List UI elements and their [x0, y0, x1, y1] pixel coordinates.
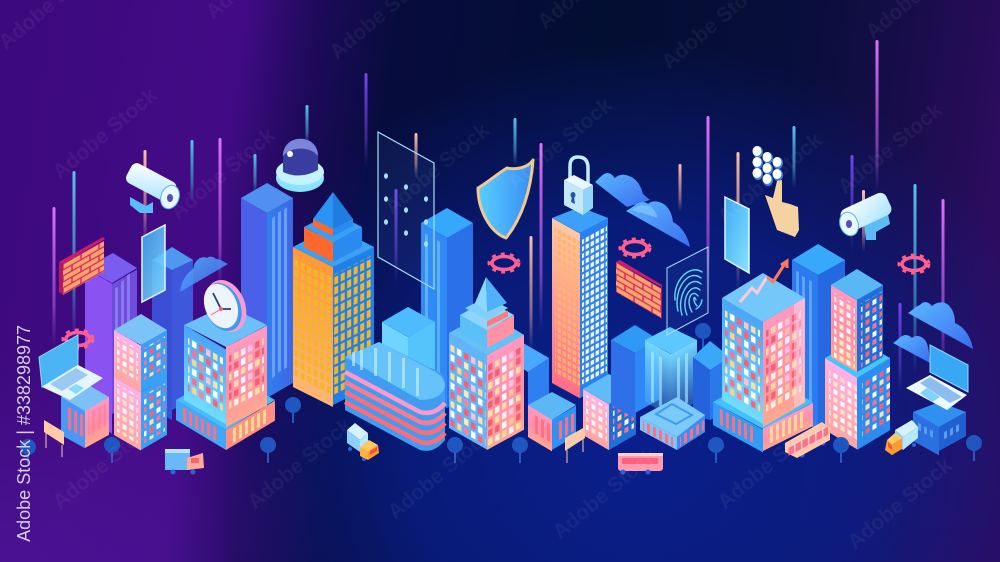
watermarks: Adobe Stock: [503, 94, 617, 194]
watermarks: Adobe Stock: [383, 424, 497, 524]
icon: center truck: [347, 423, 379, 461]
icon: right clouds: [893, 302, 973, 363]
building: pale cyan block: [382, 307, 435, 417]
icon: right truck: [885, 420, 918, 455]
building: rear block right of glass: [693, 341, 730, 420]
building: tall salmon tower: [552, 207, 608, 398]
icon: right bus: [785, 422, 830, 458]
icon: center brick wall: [616, 260, 662, 319]
watermarks: Adobe Stock: [548, 444, 662, 544]
building: purple tower: [85, 253, 137, 434]
icon: left security camera: [124, 161, 183, 213]
building: chip rooftop block: [640, 397, 705, 450]
icon: pointing hand: [765, 180, 799, 237]
icon: fingerprint panel: [667, 247, 708, 335]
icon: left cloud: [180, 257, 228, 292]
icon: right laptop: [906, 345, 968, 410]
tree: [695, 323, 711, 348]
icon: left smartphone: [142, 225, 165, 302]
building: pink tower with spire: [449, 277, 524, 450]
icon: left truck: [165, 449, 204, 474]
icon: dome camera: [276, 139, 324, 192]
building: clock tower with base: [176, 305, 275, 450]
building: blue block behind pink tower: [510, 343, 549, 420]
icon: center bus: [618, 453, 663, 474]
building: two-stack tower left: [114, 314, 167, 451]
icon: left laptop: [39, 335, 103, 400]
building: tall blue tower: [241, 183, 293, 398]
icon: padlock: [564, 157, 593, 215]
icon: gear upper right of tower: [620, 239, 650, 257]
building: glass cyan block: [645, 327, 697, 416]
icon: right smartphone: [725, 197, 749, 273]
building: orange gold tower: [293, 192, 374, 407]
watermarks: Adobe Stock: [166, 124, 280, 224]
icon: gear left: [63, 330, 93, 348]
watermarks: Adobe Stock: [843, 454, 957, 554]
icon: shield: [478, 160, 533, 238]
icon: wall clock: [197, 274, 254, 338]
icon: glass data panel: [378, 132, 434, 289]
tree: [285, 397, 301, 423]
watermarks: Adobe Stock: [48, 414, 162, 514]
watermarks: Adobe Stock: [243, 414, 357, 514]
building: small right block: [913, 402, 966, 455]
icon: left brick wall: [59, 237, 105, 295]
building: indigo tower: [152, 247, 193, 420]
watermarks: Adobe Stock: [833, 99, 947, 199]
icon: left billboard: [44, 420, 64, 457]
building: right blue tower: [792, 244, 845, 430]
icon: gear right: [899, 255, 929, 273]
building: central blue tower: [421, 208, 473, 408]
building: small block with stripes: [528, 392, 576, 451]
icon: touch keypad dots: [752, 146, 783, 186]
vertical light lines: [52, 40, 944, 393]
building: small left block: [61, 383, 109, 448]
icon: right security camera: [836, 191, 894, 240]
icon: clouds center: [595, 173, 690, 247]
icon: gear center: [489, 254, 519, 272]
watermarks: Adobe Stock: [713, 129, 827, 229]
vertical stock id text: Adobe Stock | #338298977: [14, 325, 34, 542]
building: window block: [583, 374, 636, 450]
building: two-stack tower right: [825, 269, 890, 450]
building: rounded striped building: [345, 342, 445, 451]
building: rear blue block: [611, 325, 659, 418]
rising chart arrow: [740, 261, 787, 302]
watermarks: Adobe Stock: [48, 84, 162, 184]
watermarks: Adobe Stock: [713, 414, 827, 514]
watermarks: Adobe Stock: [380, 119, 494, 219]
building: large tower with base: [713, 273, 813, 452]
icon: center billboard: [565, 427, 585, 463]
trees: [20, 435, 982, 465]
